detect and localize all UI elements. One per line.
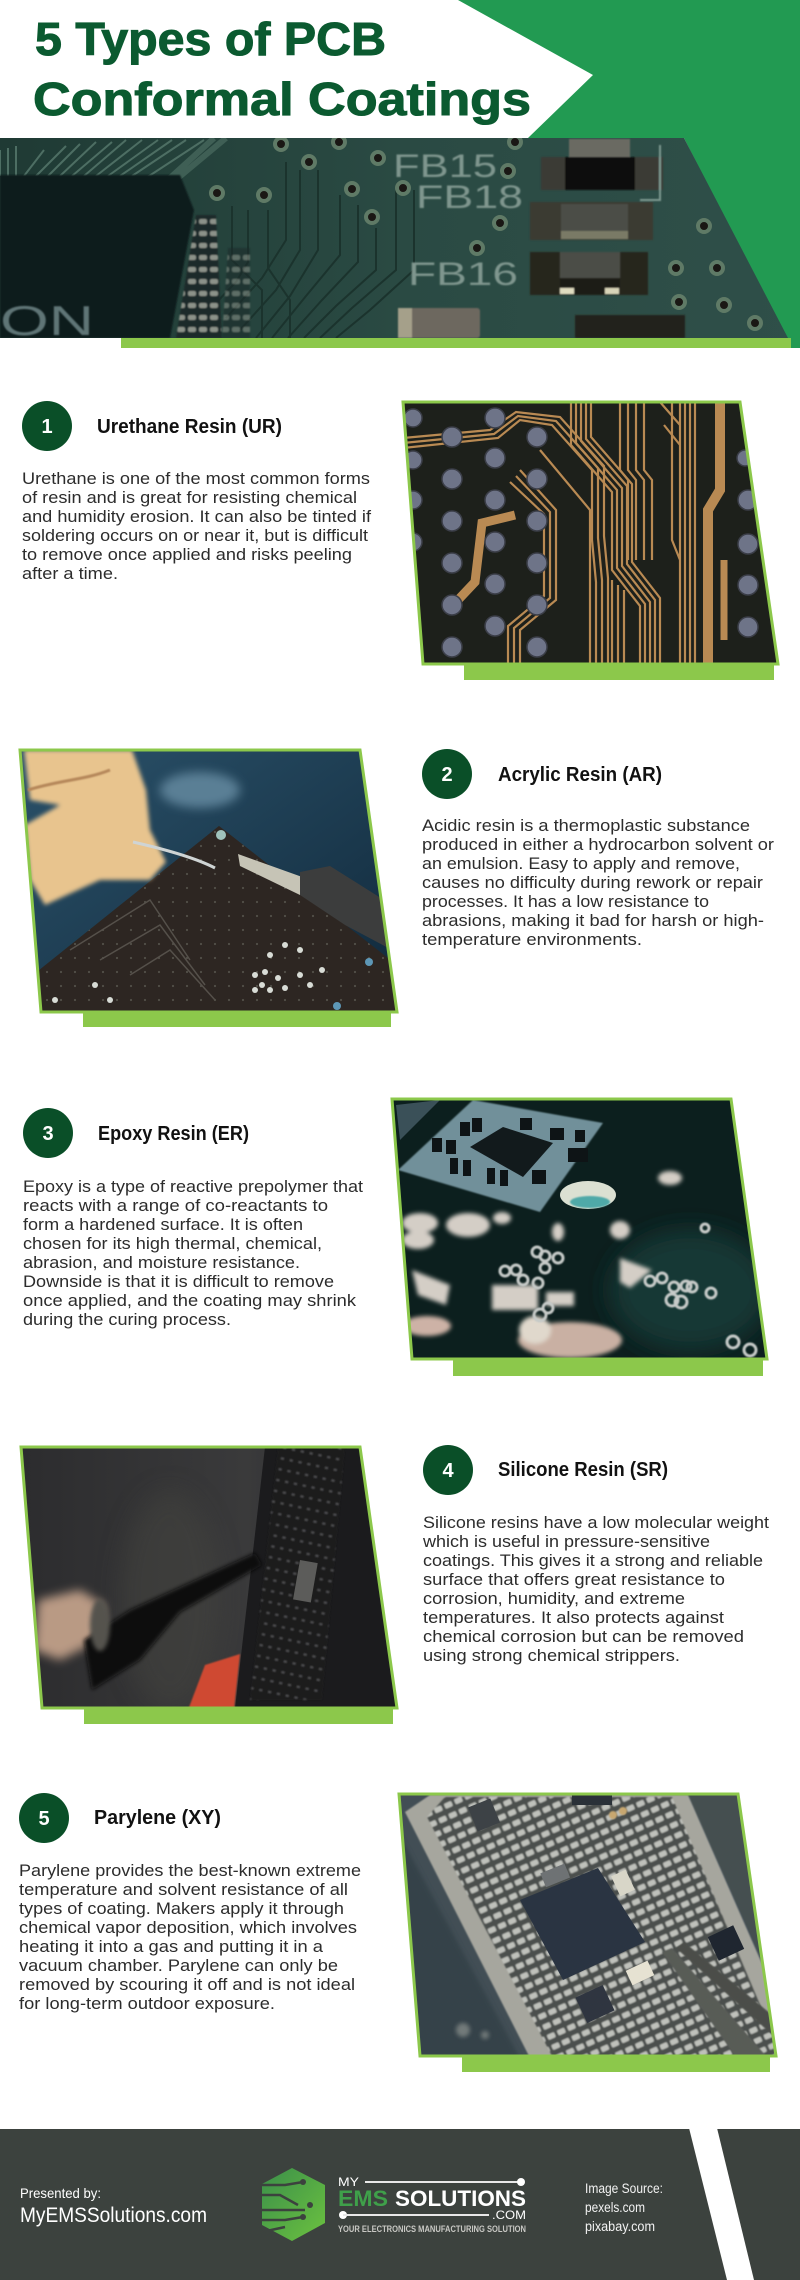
footer [0, 2128, 800, 2280]
footer white slash [689, 2128, 754, 2280]
photo: copper traces and solder balls [400, 400, 780, 666]
panel 4: silicone resin [19, 1445, 769, 1724]
photo accent bar [464, 664, 774, 680]
body text: causes no difficulty during rework or repair [422, 874, 764, 892]
image source credits [585, 2181, 663, 2234]
body text: chemical corrosion but can be removed [423, 1628, 744, 1646]
body text: during the curing process. [23, 1311, 231, 1329]
header circuit board photo [0, 136, 800, 344]
panel 2: acrylic resin [18, 748, 775, 1027]
heading: Parylene (XY) [94, 1807, 221, 1829]
heading: Urethane Resin (UR) [97, 416, 282, 438]
body text [23, 1178, 363, 1329]
panel 3: epoxy resin [23, 1097, 770, 1376]
logo [262, 2168, 526, 2241]
logo wordmark: YOUR ELECTRONICS MANUFACTURING SOLUTION [338, 2224, 526, 2234]
body text: heating it into a gas and putting it in a [19, 1938, 324, 1956]
body text: types of coating. Makers apply it through [19, 1900, 344, 1918]
body text: Downside is that it is difficult to remove [23, 1273, 334, 1291]
body text: produced in either a hydrocarbon solvent or [422, 836, 775, 854]
body text: abrasion, and moisture resistance. [23, 1254, 300, 1272]
body text: an emulsion. Easy to apply and remove, [422, 855, 740, 873]
body text: after a time. [22, 565, 118, 583]
body text: temperature and solvent resistance of all [19, 1881, 348, 1899]
number badge [423, 1445, 473, 1495]
title: Conformal Coatings [33, 73, 531, 125]
photo: soldering a board [18, 748, 400, 1014]
body text: form a hardened surface. It is often [23, 1216, 303, 1234]
number badge [23, 1108, 73, 1158]
body text: and humidity erosion. It can also be tinted if [22, 508, 371, 526]
body text: temperatures. It also protects against [423, 1609, 724, 1627]
body text: Epoxy is a type of reactive prepolymer that [23, 1178, 363, 1196]
number badge: 4 [442, 1460, 454, 1482]
logo wordmark: .COM [492, 2208, 526, 2222]
presented by: Presented by: [20, 2185, 101, 2201]
silkscreen labels [0, 148, 523, 344]
image source credits: pexels.com [585, 2200, 645, 2215]
logo wordmark: SOLUTIONS [395, 2186, 526, 2211]
heading: Acrylic Resin (AR) [498, 764, 662, 786]
body text: corrosion, humidity, and extreme [423, 1590, 685, 1608]
heading: Silicone Resin (SR) [498, 1459, 668, 1481]
body text: Acidic resin is a thermoplastic substance [422, 817, 750, 835]
body text: coatings. This gives it a strong and reliable [423, 1552, 763, 1570]
number badge: 2 [441, 764, 453, 786]
number badge [22, 401, 72, 451]
number badge [422, 749, 472, 799]
presented by [20, 2185, 207, 2227]
body text: chemical vapor deposition, which involves [19, 1919, 357, 1937]
silkscreen labels: FB15 [393, 148, 497, 184]
body text: removed by scouring it off and is not ideal [19, 1976, 355, 1994]
icon: circuit hexagon [262, 2168, 325, 2241]
body text: to remove once applied and risks peeling [22, 546, 352, 564]
body text [422, 1514, 769, 1665]
via holes [211, 136, 761, 329]
body text [19, 1862, 361, 2013]
body text: surface that offers great resistance to [423, 1571, 725, 1589]
title [33, 13, 531, 125]
title: 5 Types of PCB [35, 13, 386, 65]
body text: Silicone resins have a low molecular weight [423, 1514, 769, 1532]
body text: chosen for its high thermal, chemical, [23, 1235, 322, 1253]
body text: for long-term outdoor exposure. [19, 1995, 275, 2013]
number badge [19, 1793, 69, 1843]
panel 5: parylene [19, 1792, 780, 2072]
body text: processes. It has a low resistance to [422, 893, 709, 911]
body text [22, 470, 371, 583]
components [398, 139, 685, 338]
body text: which is useful in pressure-sensitive [422, 1533, 710, 1551]
photo: blurred circuit board [390, 1097, 770, 1361]
body text: using strong chemical strippers. [423, 1647, 680, 1665]
body text: of resin and is great for resisting chemical [22, 489, 357, 507]
body text: vacuum chamber. Parylene can only be [19, 1957, 338, 1975]
panel 1: urethane resin [22, 400, 780, 680]
body text: once applied, and the coating may shrink [23, 1292, 357, 1310]
header green arrow shape [458, 0, 800, 348]
logo wordmark: EMS [338, 2186, 388, 2211]
number badge: 3 [42, 1123, 54, 1145]
image source credits: Image Source: [585, 2181, 663, 2196]
logo wordmark [338, 2175, 526, 2234]
body text: abrasions, making it bad for harsh or high- [422, 912, 764, 930]
photo: probe on a dark board [19, 1445, 399, 1710]
body text: Urethane is one of the most common forms [22, 470, 370, 488]
photo accent bar [462, 2056, 770, 2072]
header lime bar [121, 338, 791, 348]
silkscreen labels: FB18 [416, 179, 523, 215]
silkscreen labels: FB16 [408, 256, 518, 292]
body text: Parylene provides the best-known extreme [19, 1862, 361, 1880]
footer background [0, 2129, 800, 2280]
body text: temperature environments. [422, 931, 642, 949]
photo accent bar [84, 1708, 393, 1724]
photo: phone logic board and tweezers [397, 1792, 780, 2058]
photo accent bar [453, 1359, 763, 1376]
number badge: 5 [38, 1808, 50, 1830]
heading: Epoxy Resin (ER) [98, 1123, 249, 1145]
number badge: 1 [41, 416, 53, 438]
body text: soldering occurs on or near it, but is difficult [22, 527, 368, 545]
logo wordmark: MY [338, 2175, 359, 2189]
body text [422, 817, 775, 949]
silkscreen labels: ON [0, 297, 94, 344]
photo accent bar [83, 1012, 391, 1027]
image source credits: pixabay.com [585, 2219, 655, 2234]
body text: reacts with a range of co-reactants to [23, 1197, 328, 1215]
presented by: MyEMSSolutions.com [20, 2204, 207, 2227]
